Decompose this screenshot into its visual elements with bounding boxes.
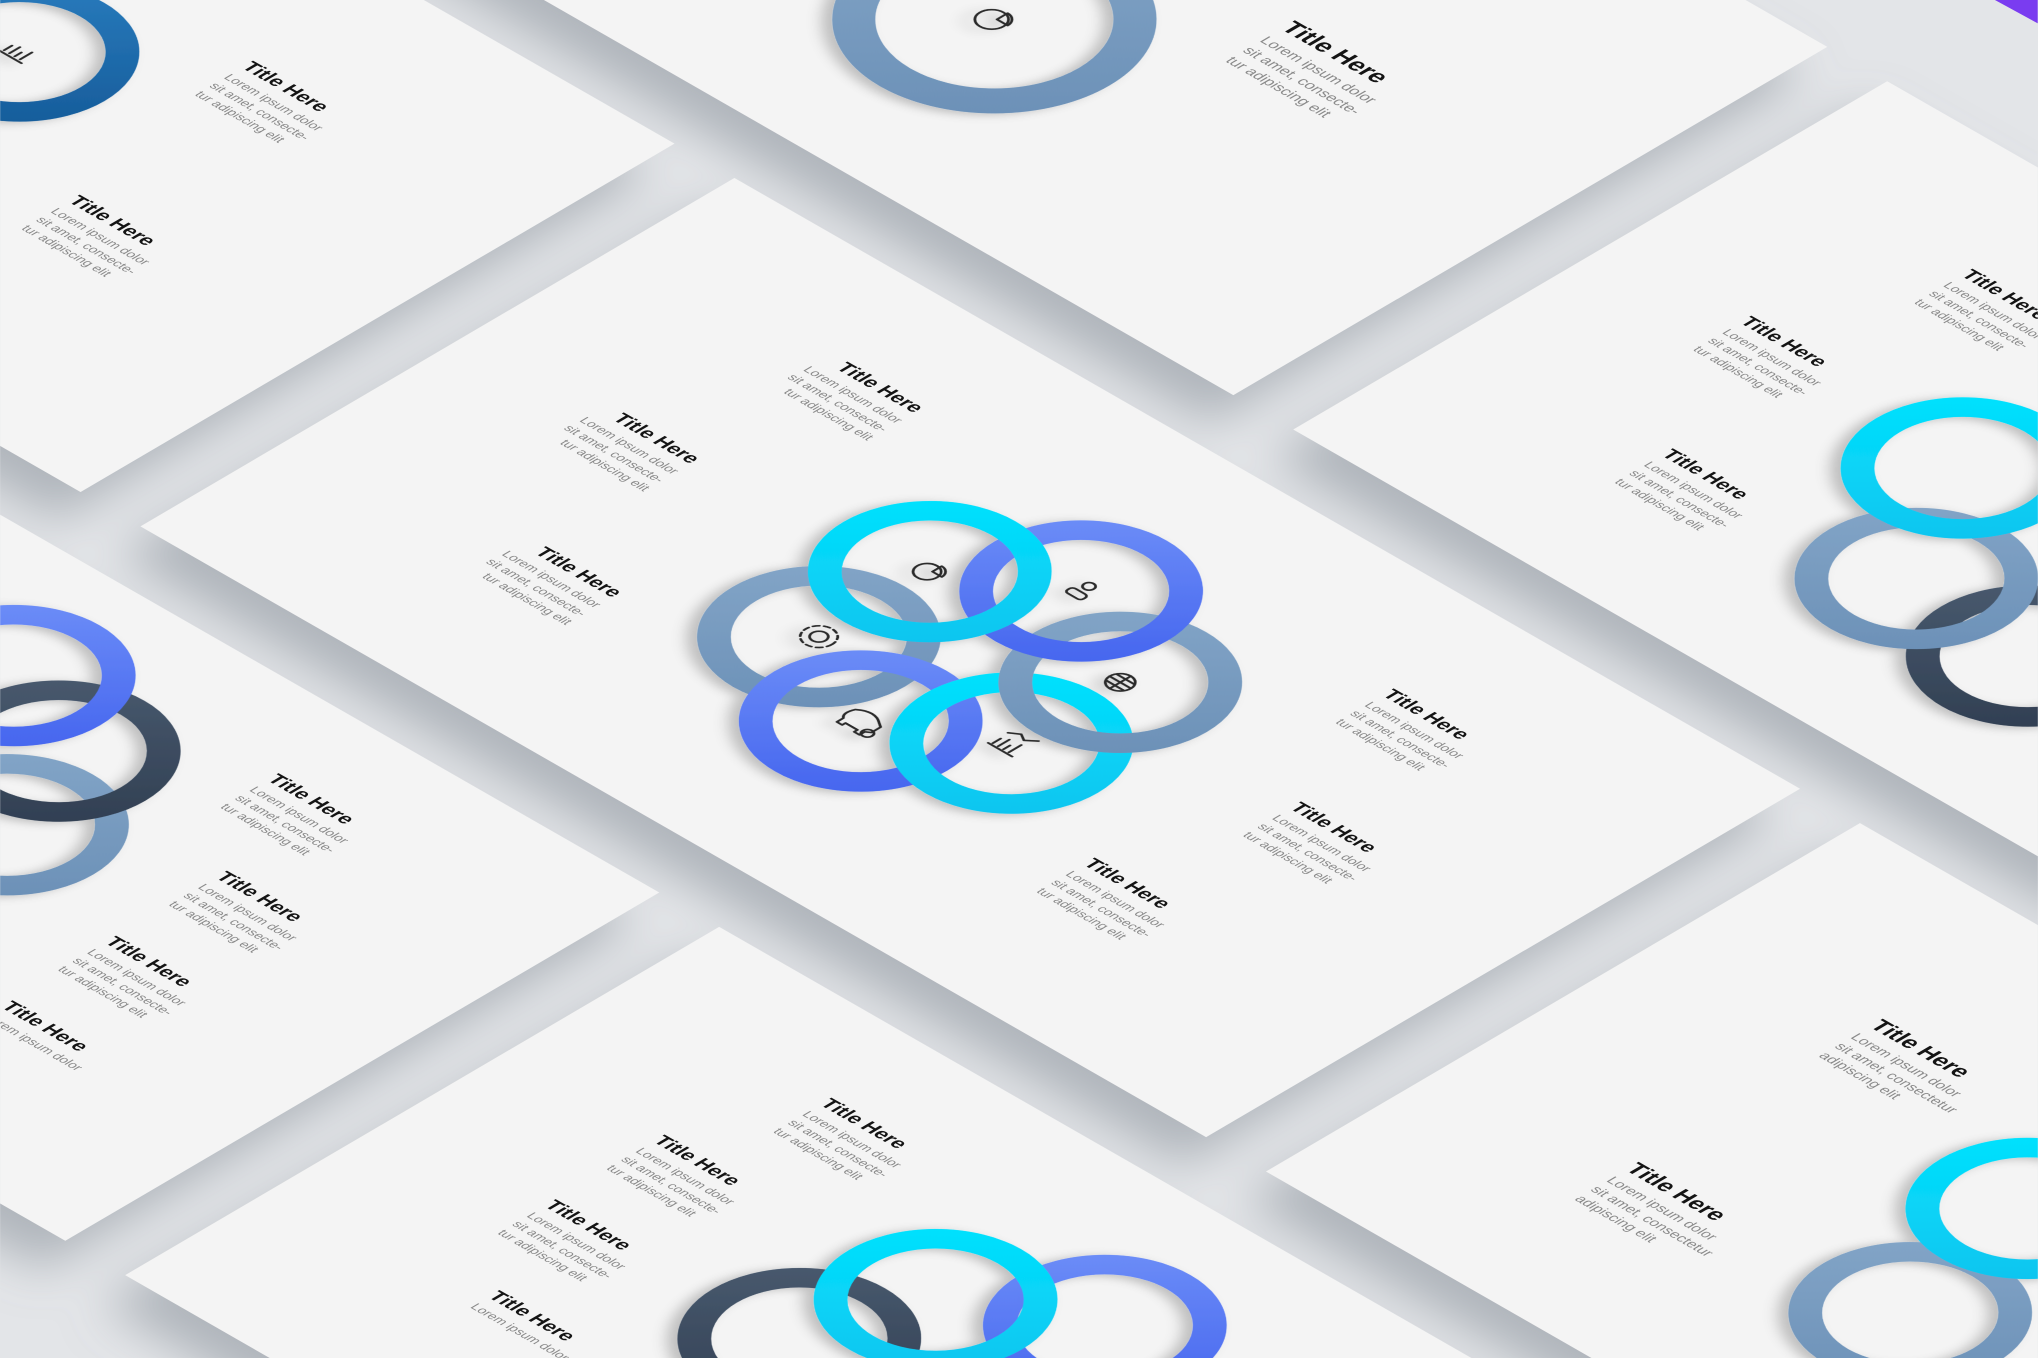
text block: top-right 3: Title Here: [1656, 446, 1754, 502]
text block: bottom slide 2: Lorem ipsum dolor: [632, 1146, 739, 1207]
text block: top-right 2: tur adipiscing elit: [1690, 344, 1787, 400]
text block: bottom-right 1: [1815, 1016, 2004, 1125]
text block: left middle: Title Here: [607, 411, 705, 467]
text block: bottom slide 4: Title Here: [483, 1288, 581, 1344]
text block: left middle: [560, 412, 697, 492]
text block: left bottom: [482, 546, 619, 626]
text block: right middle: Title Here: [1285, 800, 1382, 856]
text block: top-left 2: tur adipiscing elit: [18, 223, 116, 279]
text block: right bottom: Title Here: [1078, 856, 1176, 912]
ring: globe: [984, 609, 1242, 757]
text block: right middle: [1244, 801, 1374, 884]
text block: bottom slide 1: Title Here: [815, 1096, 913, 1152]
panel: bottom slide: [470, 1098, 1228, 1358]
text block: bottom slide 3: Title Here: [539, 1197, 637, 1253]
text block: left slide 1: Title Here: [262, 771, 360, 827]
text block: right bottom: tur adipiscing elit: [1033, 886, 1131, 942]
text block: right middle: tur adipiscing elit: [1240, 830, 1337, 886]
text block: right bottom: sit amet, consecte-: [1048, 877, 1156, 939]
text block: right bottom: [1037, 858, 1168, 940]
panel: top-right slide: [1615, 268, 2038, 732]
text block: top-left 2: [22, 194, 153, 278]
text block: top-right 1: sit amet, consecte-: [1925, 288, 2033, 350]
text block: bottom slide 3: tur adipiscing elit: [494, 1227, 592, 1283]
text block: top-left 1: Title Here: [237, 59, 334, 115]
text block: left slide 2: [169, 870, 300, 953]
text block: bottom-right 2: sit amet, consectetur: [1586, 1184, 1717, 1259]
ring: chart: [872, 671, 1132, 820]
text block: bottom slide 3: [498, 1199, 629, 1282]
text block: top slide: [1226, 20, 1385, 118]
text block: bottom slide 1: [774, 1098, 904, 1180]
text block: left slide 1: sit amet, consecte-: [232, 793, 339, 855]
text block: right bottom: Lorem ipsum dolor: [1062, 869, 1169, 930]
text block: bottom-right 1: sit amet, consectetur: [1830, 1041, 1961, 1116]
text block: left top: tur adipiscing elit: [780, 386, 878, 443]
text block: bottom slide 2: tur adipiscing elit: [603, 1163, 701, 1219]
text block: left slide 2: Lorem ipsum dolor: [194, 882, 302, 943]
ring: top-left slide: [0, 0, 140, 128]
text block: left slide 3: tur adipiscing elit: [55, 964, 152, 1020]
text block: top-right 2: [1694, 316, 1824, 398]
text block: left top: [784, 362, 920, 441]
text block: left bottom: Title Here: [530, 544, 627, 600]
text block: top slide: Title Here: [1275, 18, 1395, 87]
text block: bottom-right 2: adipiscing elit: [1570, 1193, 1660, 1245]
text block: right top: Lorem ipsum dolor: [1361, 700, 1468, 761]
text block: left slide 2: sit amet, consecte-: [180, 890, 288, 952]
text block: top slide: sit amet, consecte-: [1238, 45, 1365, 117]
text block: right top: [1336, 688, 1466, 771]
text block: top-left 1: Lorem ipsum dolor: [221, 72, 328, 133]
panel: central slide flower diagram: [680, 498, 1242, 820]
text block: bottom slide 3: Lorem ipsum dolor: [523, 1210, 630, 1272]
text block: left middle: sit amet, consecte-: [560, 423, 668, 485]
text block: top-right 3: [1615, 448, 1746, 531]
text block: top-right 2: sit amet, consecte-: [1704, 335, 1812, 397]
text block: top-right 3: sit amet, consecte-: [1626, 468, 1734, 530]
text block: right middle: sit amet, consecte-: [1254, 821, 1362, 883]
ring: top slide: [814, 0, 1157, 119]
text block: top-left 1: sit amet, consecte-: [206, 80, 314, 142]
text block: left slide 3: sit amet, consecte-: [69, 955, 177, 1017]
text block: top-left 2: sit amet, consecte-: [33, 214, 141, 276]
panel: top slide: [814, 0, 1385, 119]
text block: top-left 2: Lorem ipsum dolor: [47, 206, 154, 267]
text block: bottom-right 2: Lorem ipsum dolor: [1602, 1175, 1721, 1243]
panel: bottom-right slide: [1569, 1016, 2038, 1358]
panel: left slide: [0, 602, 352, 1070]
text block: left top: Title Here: [831, 360, 929, 416]
text block: left slide 2: Title Here: [211, 869, 308, 925]
text block: left middle: Lorem ipsum dolor: [576, 415, 683, 476]
text block: right top: Title Here: [1377, 687, 1475, 743]
purple corner slide: [1995, 0, 2038, 23]
text block: left slide 3: Lorem ipsum dolor: [84, 947, 191, 1008]
ring: gear: [680, 564, 940, 713]
text block: top slide: Lorem ipsum dolor: [1256, 34, 1380, 106]
rings: bottom slide: [660, 1226, 1228, 1358]
text block: bottom slide 2: sit amet, consecte-: [618, 1154, 725, 1216]
text block: left top: sit amet, consecte-: [784, 372, 892, 434]
text block: top-left 1: [196, 60, 326, 144]
text block: top slide: tur adipiscing elit: [1221, 55, 1336, 120]
text block: top-right 1: tur adipiscing elit: [1911, 297, 2008, 353]
text block: bottom-right 1: Title Here: [1865, 1016, 1978, 1081]
text block: left slide 1: tur adipiscing elit: [217, 801, 315, 857]
text block: right top: tur adipiscing elit: [1332, 717, 1430, 773]
text block: left middle: tur adipiscing elit: [557, 437, 654, 493]
text block: top-right 3: tur adipiscing elit: [1611, 476, 1709, 532]
text block: left bottom: Lorem ipsum dolor: [498, 549, 606, 610]
text block: bottom slide 3: sit amet, consecte-: [509, 1219, 617, 1281]
text block: bottom slide 1: tur adipiscing elit: [770, 1126, 867, 1182]
text block: top-left 1: tur adipiscing elit: [192, 89, 289, 145]
text block: left bottom: sit amet, consecte-: [483, 556, 590, 618]
ring: pie chart: [792, 498, 1052, 647]
text block: left slide 2: tur adipiscing elit: [165, 899, 263, 955]
text block: top-right 1: [1914, 268, 2038, 352]
text block: left top: Lorem ipsum dolor: [800, 364, 907, 426]
text block: bottom slide 1: Lorem ipsum dolor: [799, 1109, 906, 1170]
ring: user: [942, 518, 1204, 667]
text block: bottom-right 1: adipiscing elit: [1815, 1050, 1904, 1102]
text block: bottom-right 1: Lorem ipsum dolor: [1846, 1032, 1965, 1100]
text block: top-right 2: Title Here: [1735, 314, 1832, 370]
ring: piggy bank: [721, 648, 983, 798]
text block: top-right 2: Lorem ipsum dolor: [1719, 327, 1826, 388]
text block: left slide 1: Lorem ipsum dolor: [246, 784, 353, 846]
rings: bottom-right slide: [1731, 1122, 2038, 1358]
text block: top-left 2: Title Here: [63, 193, 161, 249]
text block: left slide 1: [221, 773, 352, 856]
text block: right top: sit amet, consecte-: [1347, 708, 1455, 770]
rings: top-right slide: [1777, 394, 2038, 732]
text block: left slide 3: Title Here: [100, 934, 197, 990]
text block: bottom slide 2: Title Here: [648, 1133, 746, 1189]
text block: left slide 3: [58, 936, 189, 1018]
text block: bottom-right 2: Title Here: [1620, 1159, 1733, 1224]
text block: left bottom: tur adipiscing elit: [479, 571, 576, 627]
text block: bottom slide 1: sit amet, consecte-: [784, 1117, 892, 1179]
panel: top-left slide: [0, 0, 326, 278]
text block: top-right 3: Lorem ipsum dolor: [1640, 459, 1748, 521]
rings: left slide: [0, 602, 181, 901]
text block: bottom-right 2: [1570, 1159, 1760, 1268]
text block: right middle: Lorem ipsum dolor: [1269, 813, 1376, 874]
text block: bottom slide 2: [607, 1134, 738, 1217]
